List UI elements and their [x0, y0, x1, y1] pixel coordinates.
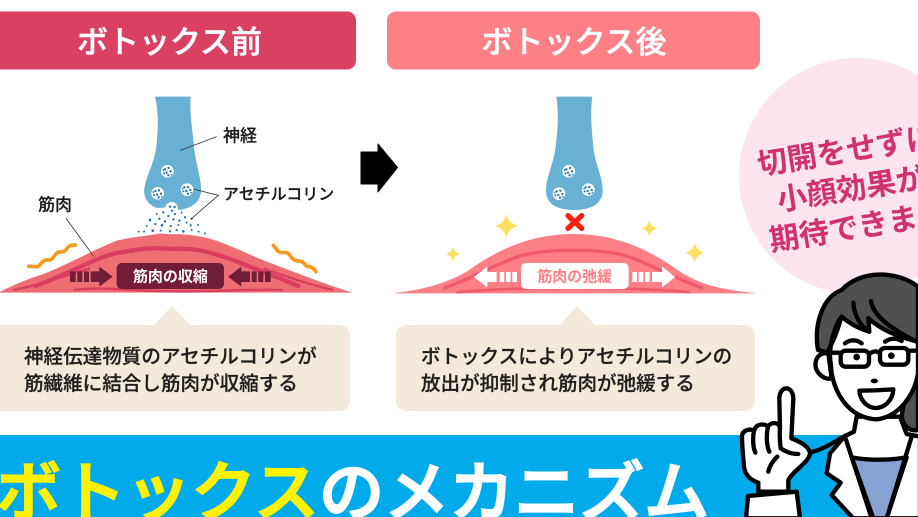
header: before botox: ボトックス前	[77, 25, 262, 60]
callout: before botox: 筋繊維に結合し筋肉が収縮する	[24, 373, 298, 395]
brows	[845, 339, 902, 343]
face	[830, 317, 918, 419]
label: acetylcholine: アセチルコリン	[223, 187, 334, 204]
vesicle dots	[138, 167, 206, 234]
nerve ending	[144, 97, 201, 210]
arm line	[810, 436, 845, 453]
arrow right	[228, 267, 271, 287]
sleeve	[746, 492, 800, 517]
squiggle left	[29, 245, 75, 267]
shirt	[852, 457, 907, 517]
callout: after botox: 放出が抑制され筋肉が弛緩する	[421, 373, 695, 395]
label box: muscle relaxation: 筋肉の弛緩	[537, 268, 612, 286]
arrow right	[632, 267, 675, 287]
ear	[815, 353, 832, 379]
label: nerve: 神経	[223, 127, 257, 146]
vesicles	[553, 165, 595, 200]
coat and neck	[827, 417, 918, 517]
callout: before botox: 神経伝達物質のアセチルコリンが	[24, 346, 317, 368]
header: after botox: ボトックス後	[481, 25, 667, 60]
callout: after botox: ボトックスによりアセチルコリンの	[421, 346, 732, 368]
sparkles	[446, 214, 704, 263]
nose	[871, 379, 878, 383]
block arrow between panels	[361, 144, 398, 192]
red cross	[568, 216, 582, 228]
eyes	[853, 354, 860, 360]
callout: after botox	[396, 306, 755, 411]
label box: muscle relaxation	[521, 263, 629, 289]
label box: muscle contraction	[117, 263, 224, 289]
muscle: contracted	[0, 233, 353, 293]
vesicle dots	[554, 167, 593, 199]
arrow left	[70, 267, 113, 287]
header: after botox	[387, 12, 760, 70]
hair back	[817, 275, 918, 430]
leader lines	[66, 137, 218, 257]
arrow left	[474, 267, 517, 287]
vesicles	[151, 165, 193, 215]
muscle: relaxed	[393, 234, 757, 293]
panel: before botox illustration	[0, 97, 353, 293]
speech bubble	[739, 58, 918, 294]
glasses	[832, 351, 918, 354]
title band	[0, 435, 918, 517]
lapels	[845, 437, 912, 517]
doctor character	[742, 275, 918, 517]
callout: before botox	[0, 306, 350, 411]
hand pointing	[742, 388, 810, 492]
nerve ending	[546, 97, 603, 210]
panel: after botox illustration	[393, 97, 757, 293]
hair strands	[828, 301, 917, 350]
mouth	[859, 389, 893, 408]
squiggle right	[273, 245, 316, 272]
label box: muscle contraction: 筋肉の収縮	[133, 268, 208, 286]
fingers	[753, 427, 798, 472]
label: muscle: 筋肉	[38, 195, 72, 214]
header: before botox	[0, 12, 356, 70]
